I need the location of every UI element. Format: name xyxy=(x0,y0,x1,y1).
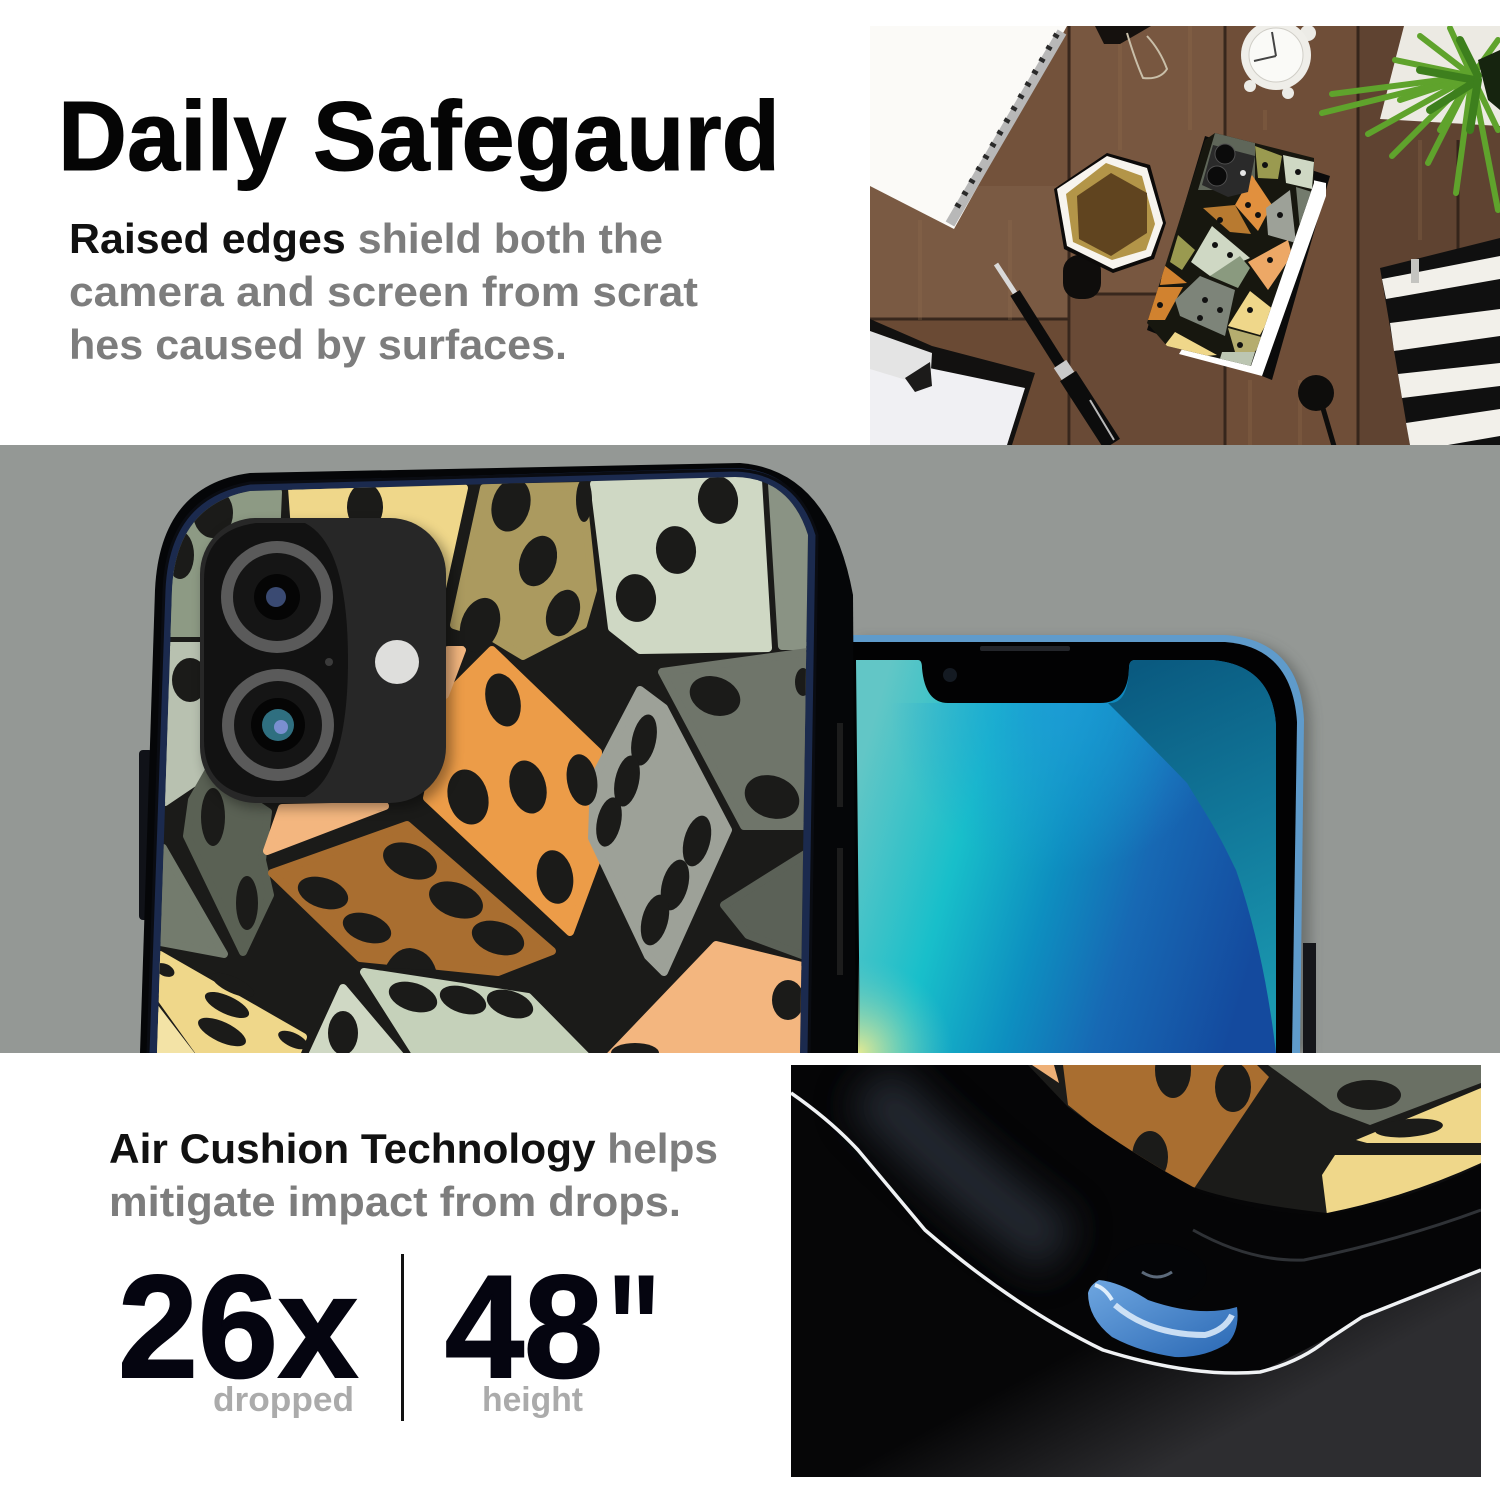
text block: raised edges: Raised edges shield both the xyxy=(69,215,663,262)
text block: raised edges xyxy=(69,215,698,368)
panel: air cushion macro photo xyxy=(791,1042,1481,1477)
pale left die xyxy=(165,646,205,802)
front camera xyxy=(943,668,957,682)
lens housing xyxy=(204,523,348,797)
droplet highlights xyxy=(1115,1305,1232,1335)
sage sliver die xyxy=(772,484,812,646)
phone with dice case on desk xyxy=(1140,130,1330,380)
phone shadow xyxy=(1236,636,1316,1053)
spiral notebook xyxy=(870,26,1067,229)
front phone with screen xyxy=(850,635,1316,1053)
panel: desk lifestyle photo xyxy=(870,20,1500,446)
yellow bottom die xyxy=(157,955,303,1060)
pale bottom die xyxy=(364,972,590,1060)
phone bezel xyxy=(850,642,1297,1053)
stat: 26x dropped: 26x xyxy=(118,1245,358,1408)
wallpaper corner glow xyxy=(858,962,944,1053)
bumper glow xyxy=(870,1085,1060,1250)
wood desk surface xyxy=(870,26,1500,445)
pale triangle die xyxy=(310,988,404,1060)
coffee cup xyxy=(1054,153,1166,299)
plant in white pot xyxy=(1322,26,1500,210)
wallpaper right region xyxy=(1108,660,1276,1053)
flash xyxy=(375,640,419,684)
phone body xyxy=(850,635,1304,1053)
stat: 48 inches height: '' xyxy=(610,1245,658,1408)
pale die xyxy=(594,480,768,650)
side button xyxy=(1303,943,1316,1053)
wallpaper top tint xyxy=(933,703,1175,802)
stat divider xyxy=(401,1254,404,1421)
pen xyxy=(996,264,1114,444)
clipboard xyxy=(870,319,1035,445)
screen wallpaper xyxy=(856,660,1276,1053)
peach bottom die xyxy=(606,945,810,1060)
microphone dot xyxy=(325,658,333,666)
panel: grey product band xyxy=(0,445,1500,1053)
dark right die xyxy=(662,652,808,826)
stat: 48 inches height: height xyxy=(482,1381,583,1419)
binder clip xyxy=(1095,26,1167,78)
case artwork seen through corner xyxy=(1028,1042,1481,1225)
speaker xyxy=(980,646,1070,651)
light yellow corner xyxy=(155,1008,195,1060)
bumper body xyxy=(791,1065,1481,1372)
text block: air cushion technology: mitigate impact from drops. xyxy=(109,1178,681,1225)
text block: raised edges: hes caused by surfaces. xyxy=(69,321,567,368)
dark sage die xyxy=(187,772,270,952)
text block: raised edges: camera and screen from scrat xyxy=(69,268,698,315)
dice artwork xyxy=(150,460,830,1063)
alarm clock xyxy=(1241,20,1316,99)
side buttons xyxy=(139,750,150,920)
sage top-left die xyxy=(170,492,278,633)
lower lens xyxy=(222,669,334,781)
case navy rim xyxy=(157,477,808,1053)
title: Daily Safegaurd xyxy=(58,81,780,191)
sage wedge die xyxy=(160,848,224,954)
text block: air cushion technology xyxy=(109,1125,718,1225)
faint button seams xyxy=(837,723,843,975)
grey diamond die xyxy=(592,690,728,972)
upper lens xyxy=(221,541,333,653)
die pips xyxy=(153,473,811,1063)
stat: 26x dropped: dropped xyxy=(213,1381,354,1419)
earbud xyxy=(1298,375,1334,446)
stat: 48 inches height: 48 xyxy=(445,1245,603,1408)
yellow top die xyxy=(292,488,464,600)
text block: air cushion technology: Air Cushion Technology helps xyxy=(109,1125,718,1172)
inner rim line xyxy=(1193,1210,1481,1260)
peach under camera xyxy=(267,806,385,851)
bumper highlight line xyxy=(791,1093,1481,1373)
camera island xyxy=(200,518,446,803)
dark corner die xyxy=(724,851,810,958)
brown die xyxy=(272,825,552,972)
camera shadow xyxy=(204,524,452,808)
striped notebook xyxy=(1380,238,1500,445)
back phone with dice case xyxy=(139,460,856,1063)
droplet xyxy=(1088,1280,1238,1357)
dark backdrop xyxy=(791,1065,1481,1477)
tan die xyxy=(454,486,593,656)
orange die xyxy=(427,650,598,932)
case frame xyxy=(140,463,856,1053)
droplet dome xyxy=(1107,1243,1207,1307)
